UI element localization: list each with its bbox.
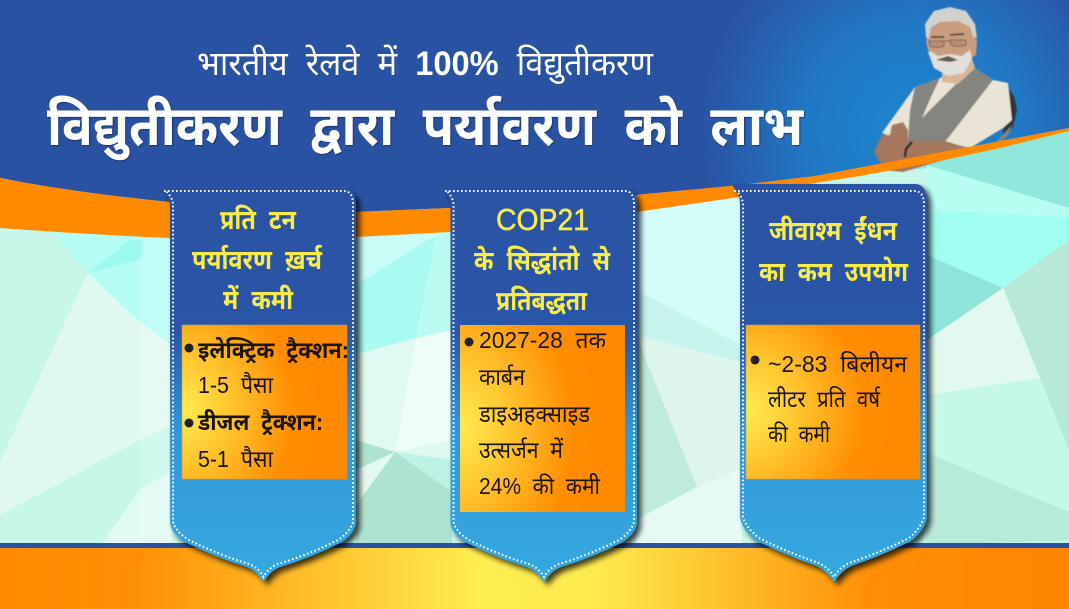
bullet list: 5-1 पैसा <box>198 446 274 472</box>
bullet text: उत्सर्जन में <box>479 437 564 463</box>
bullet text: लीटर प्रति वर्ष <box>768 386 881 412</box>
orange swoosh <box>0 128 1069 238</box>
portrait: brows and eyes <box>931 34 964 37</box>
orange content box <box>746 325 920 479</box>
heading: के सिद्धांतो से <box>474 245 611 276</box>
background: pale geometric facets <box>0 130 1069 545</box>
portrait: cream shirt <box>882 67 1012 148</box>
bullet text: कार्बन <box>479 364 526 390</box>
bullet text: डाइअहक्साइड <box>478 401 591 427</box>
ribbon shape <box>442 190 637 582</box>
bullet list <box>184 337 349 472</box>
portrait: face <box>926 18 977 75</box>
bullet text: 24% की कमी <box>479 473 601 499</box>
heading <box>192 205 323 315</box>
portrait: white hair <box>925 7 977 38</box>
heading <box>759 215 909 287</box>
portrait: man with arms crossed <box>874 7 1017 172</box>
bullet text: की कमी <box>768 421 831 447</box>
panel: cost per tonne <box>162 190 356 582</box>
heading: का कम उपयोग <box>759 257 909 287</box>
header blue field <box>0 0 1069 212</box>
bottom stripe and gradient band <box>0 543 1069 609</box>
portrait: glasses <box>929 40 966 48</box>
bullet list: 1-5 पैसा <box>198 372 274 398</box>
orange content box <box>182 325 347 479</box>
title line: Indian Railways 100% electrification: भारतीय रेलवे में 100% विद्युतीकरण <box>197 44 654 84</box>
panel: reduced fossil fuel use <box>730 184 927 582</box>
ribbon shape <box>730 184 927 582</box>
bullet text: 2027-28 तक <box>479 327 607 353</box>
heading: प्रतिबद्धता <box>496 286 588 316</box>
portrait: grey vest <box>908 67 993 142</box>
heading <box>474 202 611 316</box>
heading: COP21 <box>496 202 589 237</box>
heading: जीवाश्म ईंधन <box>769 215 898 246</box>
bullet list: इलेक्ट्रिक ट्रैक्शन: <box>198 337 349 364</box>
portrait: neck <box>942 58 975 84</box>
heading: पर्यावरण ख़र्च <box>192 244 323 275</box>
bullet list: डीजल ट्रैक्शन: <box>197 409 323 436</box>
heading: में कमी <box>223 284 294 315</box>
ribbon shape <box>162 190 356 582</box>
bullet text <box>750 351 908 447</box>
bullet text: ~2-83 बिलीयन <box>768 351 908 377</box>
main heading: विद्युतीकरण द्वारा पर्यावरण को लाभ <box>47 95 804 161</box>
portrait: white beard <box>928 50 972 76</box>
portrait: dark chair back <box>1003 84 1017 136</box>
portrait: moustache <box>936 56 958 62</box>
heading: प्रति टन <box>220 205 297 235</box>
panel: COP21 commitment <box>442 190 637 582</box>
portrait: crossed forearms <box>874 122 970 172</box>
bullet text <box>464 327 607 499</box>
orange content box <box>460 325 625 512</box>
